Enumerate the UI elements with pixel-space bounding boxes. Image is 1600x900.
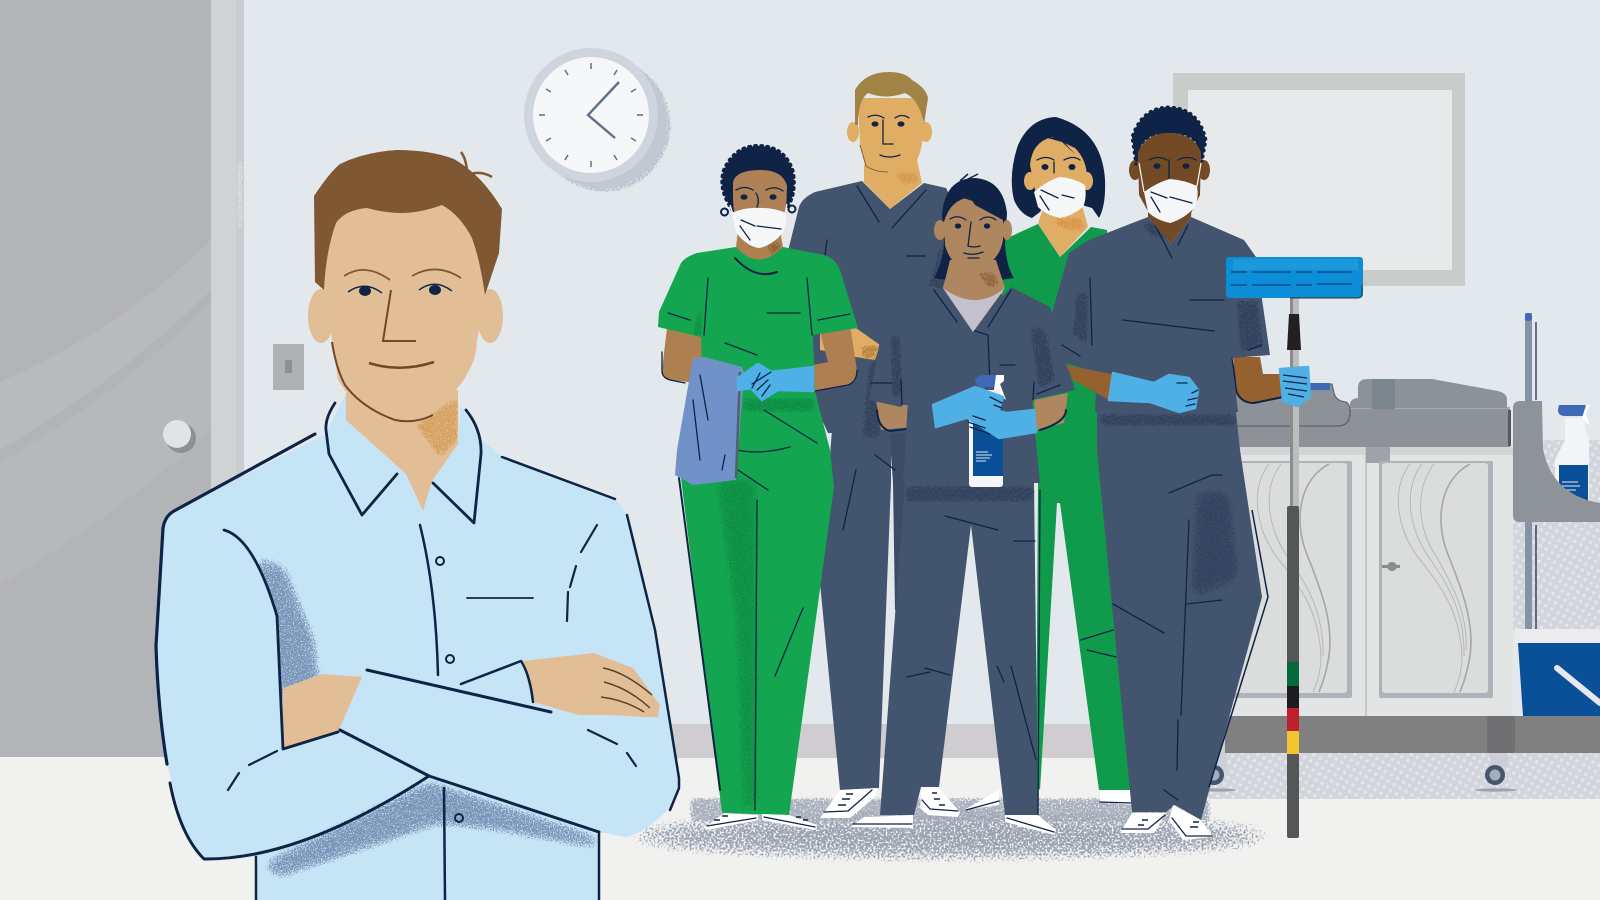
face [944, 197, 1003, 273]
shoe [850, 815, 913, 828]
glove [1109, 373, 1198, 412]
shoe [964, 790, 999, 810]
shoe [820, 788, 877, 818]
glove [966, 408, 1036, 438]
trousers [1097, 412, 1262, 820]
hair tuft [461, 152, 492, 177]
sleeve shadow [692, 295, 702, 338]
left arm [662, 328, 705, 384]
mask [1144, 179, 1198, 223]
cart top [1225, 408, 1510, 447]
head [721, 146, 796, 248]
ears [308, 289, 334, 343]
mop bucket [1515, 629, 1600, 716]
fringe [960, 197, 1005, 220]
mouth [369, 362, 434, 368]
worker: man with mop [1052, 107, 1283, 840]
eyes [1042, 164, 1048, 170]
neck shadow [1050, 218, 1085, 232]
face [1138, 133, 1201, 215]
neck [346, 380, 458, 511]
neck [1148, 200, 1192, 244]
mask [1034, 177, 1086, 218]
top [780, 181, 1005, 433]
trouser shadow [905, 486, 1034, 502]
colour bands [1287, 662, 1299, 686]
light switch [273, 344, 304, 390]
ears [934, 220, 946, 240]
cart top caddy [1350, 379, 1507, 408]
right arm [1034, 393, 1068, 430]
face details [1149, 158, 1196, 178]
neck [943, 260, 1005, 332]
cabinet door right [1379, 461, 1493, 698]
hand on mop [1280, 367, 1310, 406]
jacket shading [890, 335, 903, 400]
eyes [740, 194, 748, 200]
right arm [1233, 357, 1283, 403]
clock ticks [539, 63, 643, 167]
mop [1226, 257, 1363, 838]
picture frame [1173, 73, 1465, 286]
left hand [283, 674, 362, 748]
shirt stipple [255, 555, 599, 880]
clock [524, 48, 671, 192]
shoe [762, 814, 817, 830]
ears [1024, 172, 1036, 190]
mop shaft [1290, 298, 1299, 508]
door handle [1382, 565, 1400, 568]
shoe [1120, 813, 1166, 833]
ears [847, 122, 859, 142]
spray bottle on cart [1555, 405, 1590, 501]
shoe [1005, 815, 1056, 835]
shirt [156, 393, 679, 900]
mop collar [1287, 314, 1301, 350]
cabinet door left [1225, 461, 1352, 698]
underarm stipple [255, 555, 322, 700]
neck [864, 160, 922, 209]
baseboard [660, 724, 1280, 758]
earrings [721, 208, 728, 216]
trousers [880, 483, 1038, 815]
mask [732, 208, 786, 248]
shirt outlines [156, 403, 679, 900]
shoe [920, 787, 960, 817]
cleaning cart [1200, 313, 1600, 799]
worker: centre woman with spray bottle [850, 174, 1075, 835]
mop head [1226, 257, 1363, 298]
glove [933, 387, 1003, 427]
nose [383, 290, 416, 341]
top shading [1236, 300, 1264, 352]
cart floor shadow [1200, 753, 1600, 799]
face [858, 98, 924, 174]
face [324, 190, 485, 422]
neck shadow [892, 172, 920, 185]
outline behind trousers [1209, 510, 1268, 787]
mop handle [1287, 506, 1299, 838]
door knob [163, 420, 196, 453]
waist shadow [742, 398, 815, 412]
neck stipple [415, 396, 458, 458]
scrub fold lines [668, 278, 850, 810]
t-shirt [943, 288, 1005, 332]
top shading [862, 200, 948, 438]
face details [950, 217, 996, 258]
right hand [522, 653, 660, 717]
cloth [675, 357, 744, 485]
collar line [735, 258, 777, 274]
eyebrows [344, 269, 461, 280]
hair [314, 150, 502, 295]
scrubs [1000, 224, 1132, 790]
top lines [1062, 225, 1262, 380]
glove [738, 364, 773, 390]
jacket [869, 285, 1075, 483]
collar lines [825, 186, 926, 255]
left outline [679, 478, 720, 790]
hair back [934, 178, 1014, 282]
mop pole on cart [1525, 313, 1536, 630]
neck [736, 230, 783, 260]
arm behind [820, 328, 880, 360]
worker: green scrubs woman in back [964, 117, 1132, 810]
buttons [436, 557, 463, 822]
shoe [1169, 805, 1213, 840]
shoe [705, 813, 758, 830]
second leg behind [889, 425, 910, 610]
top [1052, 217, 1270, 412]
neck [1038, 205, 1088, 257]
hair [855, 72, 928, 125]
trouser shadow [715, 478, 757, 810]
hair [1132, 107, 1206, 165]
left tray [1225, 384, 1350, 426]
finger lines [601, 668, 652, 712]
left arm [1066, 365, 1116, 400]
wheels [1200, 753, 1517, 792]
trouser shadow [1100, 414, 1236, 426]
door reflections [1300, 464, 1471, 692]
right arm [813, 325, 857, 391]
lower shirt stipple [262, 780, 599, 880]
glove [750, 367, 813, 400]
jacket lines [871, 290, 1060, 405]
left arm [876, 400, 934, 430]
trousers [820, 430, 891, 790]
jaw [332, 342, 433, 421]
cart base [1225, 716, 1600, 753]
worker: blond man [780, 72, 1005, 818]
door and frame [0, 0, 244, 757]
cart cabinet [1225, 447, 1513, 717]
neck shadow [765, 242, 783, 256]
cart upright [1513, 401, 1600, 522]
worker: green scrubs woman with cloth [658, 146, 858, 830]
texture behind cart [1513, 440, 1600, 630]
neck shadow [976, 272, 1000, 288]
scrubs [658, 247, 858, 815]
ears [1129, 160, 1141, 180]
face [1030, 137, 1087, 205]
arm stipple [860, 345, 880, 360]
hair back [1012, 117, 1105, 218]
foreground manager [156, 150, 679, 900]
clock hands [588, 82, 619, 138]
spray bottle [969, 375, 1006, 487]
shoe [1100, 790, 1132, 805]
floor [0, 757, 1600, 900]
team floor shadow [615, 798, 1285, 860]
eyes [348, 284, 452, 296]
face details [860, 115, 909, 172]
fringe [1044, 137, 1076, 155]
